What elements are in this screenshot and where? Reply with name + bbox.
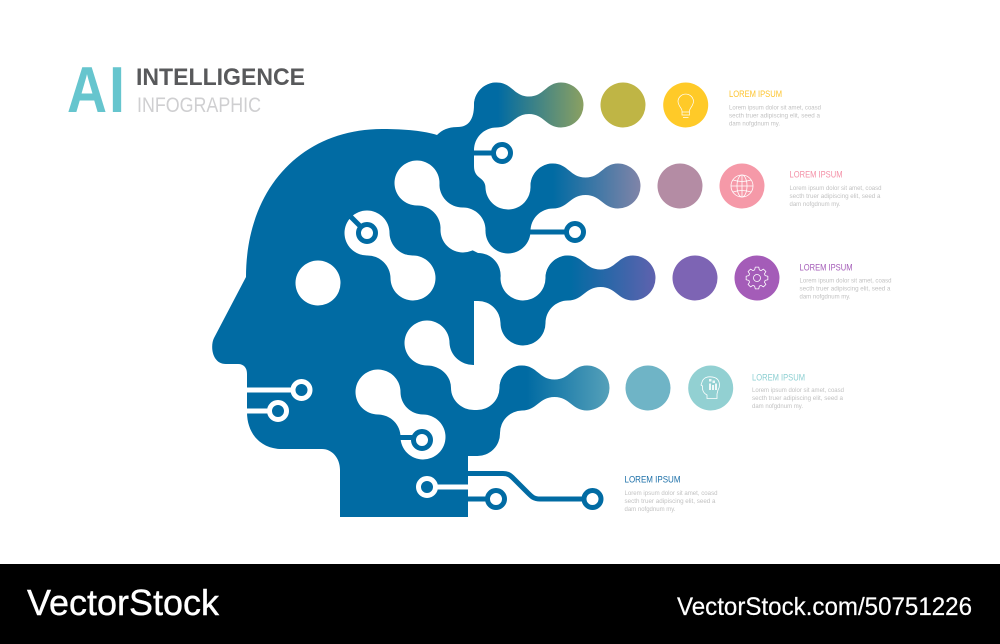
colour dot: teal — [626, 366, 670, 410]
strand 2 — [530, 164, 640, 208]
icon: gear — [734, 256, 780, 300]
text block: blue — [624, 474, 718, 513]
text block: teal: secth truer adipiscing elit, seed a — [752, 395, 843, 402]
strand 3 — [546, 256, 656, 300]
text block: pink: dam nofgdnum my. — [790, 201, 841, 208]
text block: purple: secth truer adipiscing elit, seed a — [800, 286, 891, 292]
strand 1 — [474, 82, 584, 128]
white channel: lower ring — [356, 370, 446, 460]
trace: mouth lower — [247, 402, 286, 420]
text block: pink: LOREM IPSUM — [790, 170, 842, 180]
text block: purple: LOREM IPSUM — [800, 262, 852, 272]
text block: blue: Lorem ipsum dolor sit amet, coasd — [624, 490, 718, 497]
title: INFOGRAPHIC: INFOGRAPHIC — [137, 94, 261, 117]
trace: second strand — [530, 224, 584, 240]
text block: yellow: dam nofgdnum my. — [729, 120, 780, 128]
text block: yellow: Lorem ipsum dolor sit amet, coasd — [729, 104, 821, 112]
circuit traces — [247, 144, 601, 508]
icon: globe — [720, 164, 764, 208]
text block: purple: Lorem ipsum dolor sit amet, coasd — [800, 278, 892, 284]
trace: neck inner — [418, 478, 468, 496]
title: INTELLIGENCE: INTELLIGENCE — [136, 64, 305, 91]
white channel: upper ring — [344, 210, 436, 300]
text block: pink — [790, 170, 882, 208]
trace: lower ring — [400, 432, 430, 448]
text block: teal: Lorem ipsum dolor sit amet, coasd — [752, 387, 844, 394]
footer logo: VectorStock — [27, 582, 220, 623]
text block: blue: secth truer adipiscing elit, seed a — [624, 498, 716, 505]
footer url: VectorStock.com/50751226 — [677, 593, 972, 621]
title: I: I — [109, 53, 125, 126]
text block: teal: dam nofgdnum my. — [752, 403, 803, 410]
white channel: top — [394, 160, 486, 252]
trace: top strand — [474, 144, 510, 162]
text block: blue: dam nofgdnum my. — [624, 506, 676, 513]
text block: pink: secth truer adipiscing elit, seed a — [790, 193, 881, 200]
text block: purple: dam nofgdnum my. — [800, 294, 851, 300]
text block: blue: LOREM IPSUM — [624, 474, 680, 484]
title — [67, 53, 305, 126]
text block: yellow — [729, 89, 821, 128]
trace: upper ring — [349, 215, 376, 242]
icon: head — [688, 366, 733, 410]
white dot: brain — [296, 260, 340, 306]
text block: pink: Lorem ipsum dolor sit amet, coasd — [790, 185, 882, 192]
text block: yellow: secth truer adipiscing elit, seed a — [729, 112, 820, 120]
white channel: middle — [404, 320, 474, 410]
trace: neck long — [468, 474, 601, 508]
trace: neck short — [468, 490, 504, 508]
text block: teal: LOREM IPSUM — [752, 372, 805, 382]
colour dot: violet — [672, 256, 718, 300]
title: A: A — [67, 53, 107, 126]
trace: mouth upper — [247, 382, 310, 398]
icon: light bulb — [663, 82, 708, 128]
colour dot: olive — [600, 82, 646, 128]
strand 4 — [500, 366, 610, 410]
colour dot: mauve — [658, 164, 702, 208]
footer band — [0, 564, 1000, 644]
head silhouette with circuit strands — [212, 82, 656, 517]
text block: teal — [752, 372, 844, 410]
text block: yellow: LOREM IPSUM — [729, 89, 782, 99]
head body — [212, 82, 568, 517]
text block: purple — [800, 262, 892, 300]
